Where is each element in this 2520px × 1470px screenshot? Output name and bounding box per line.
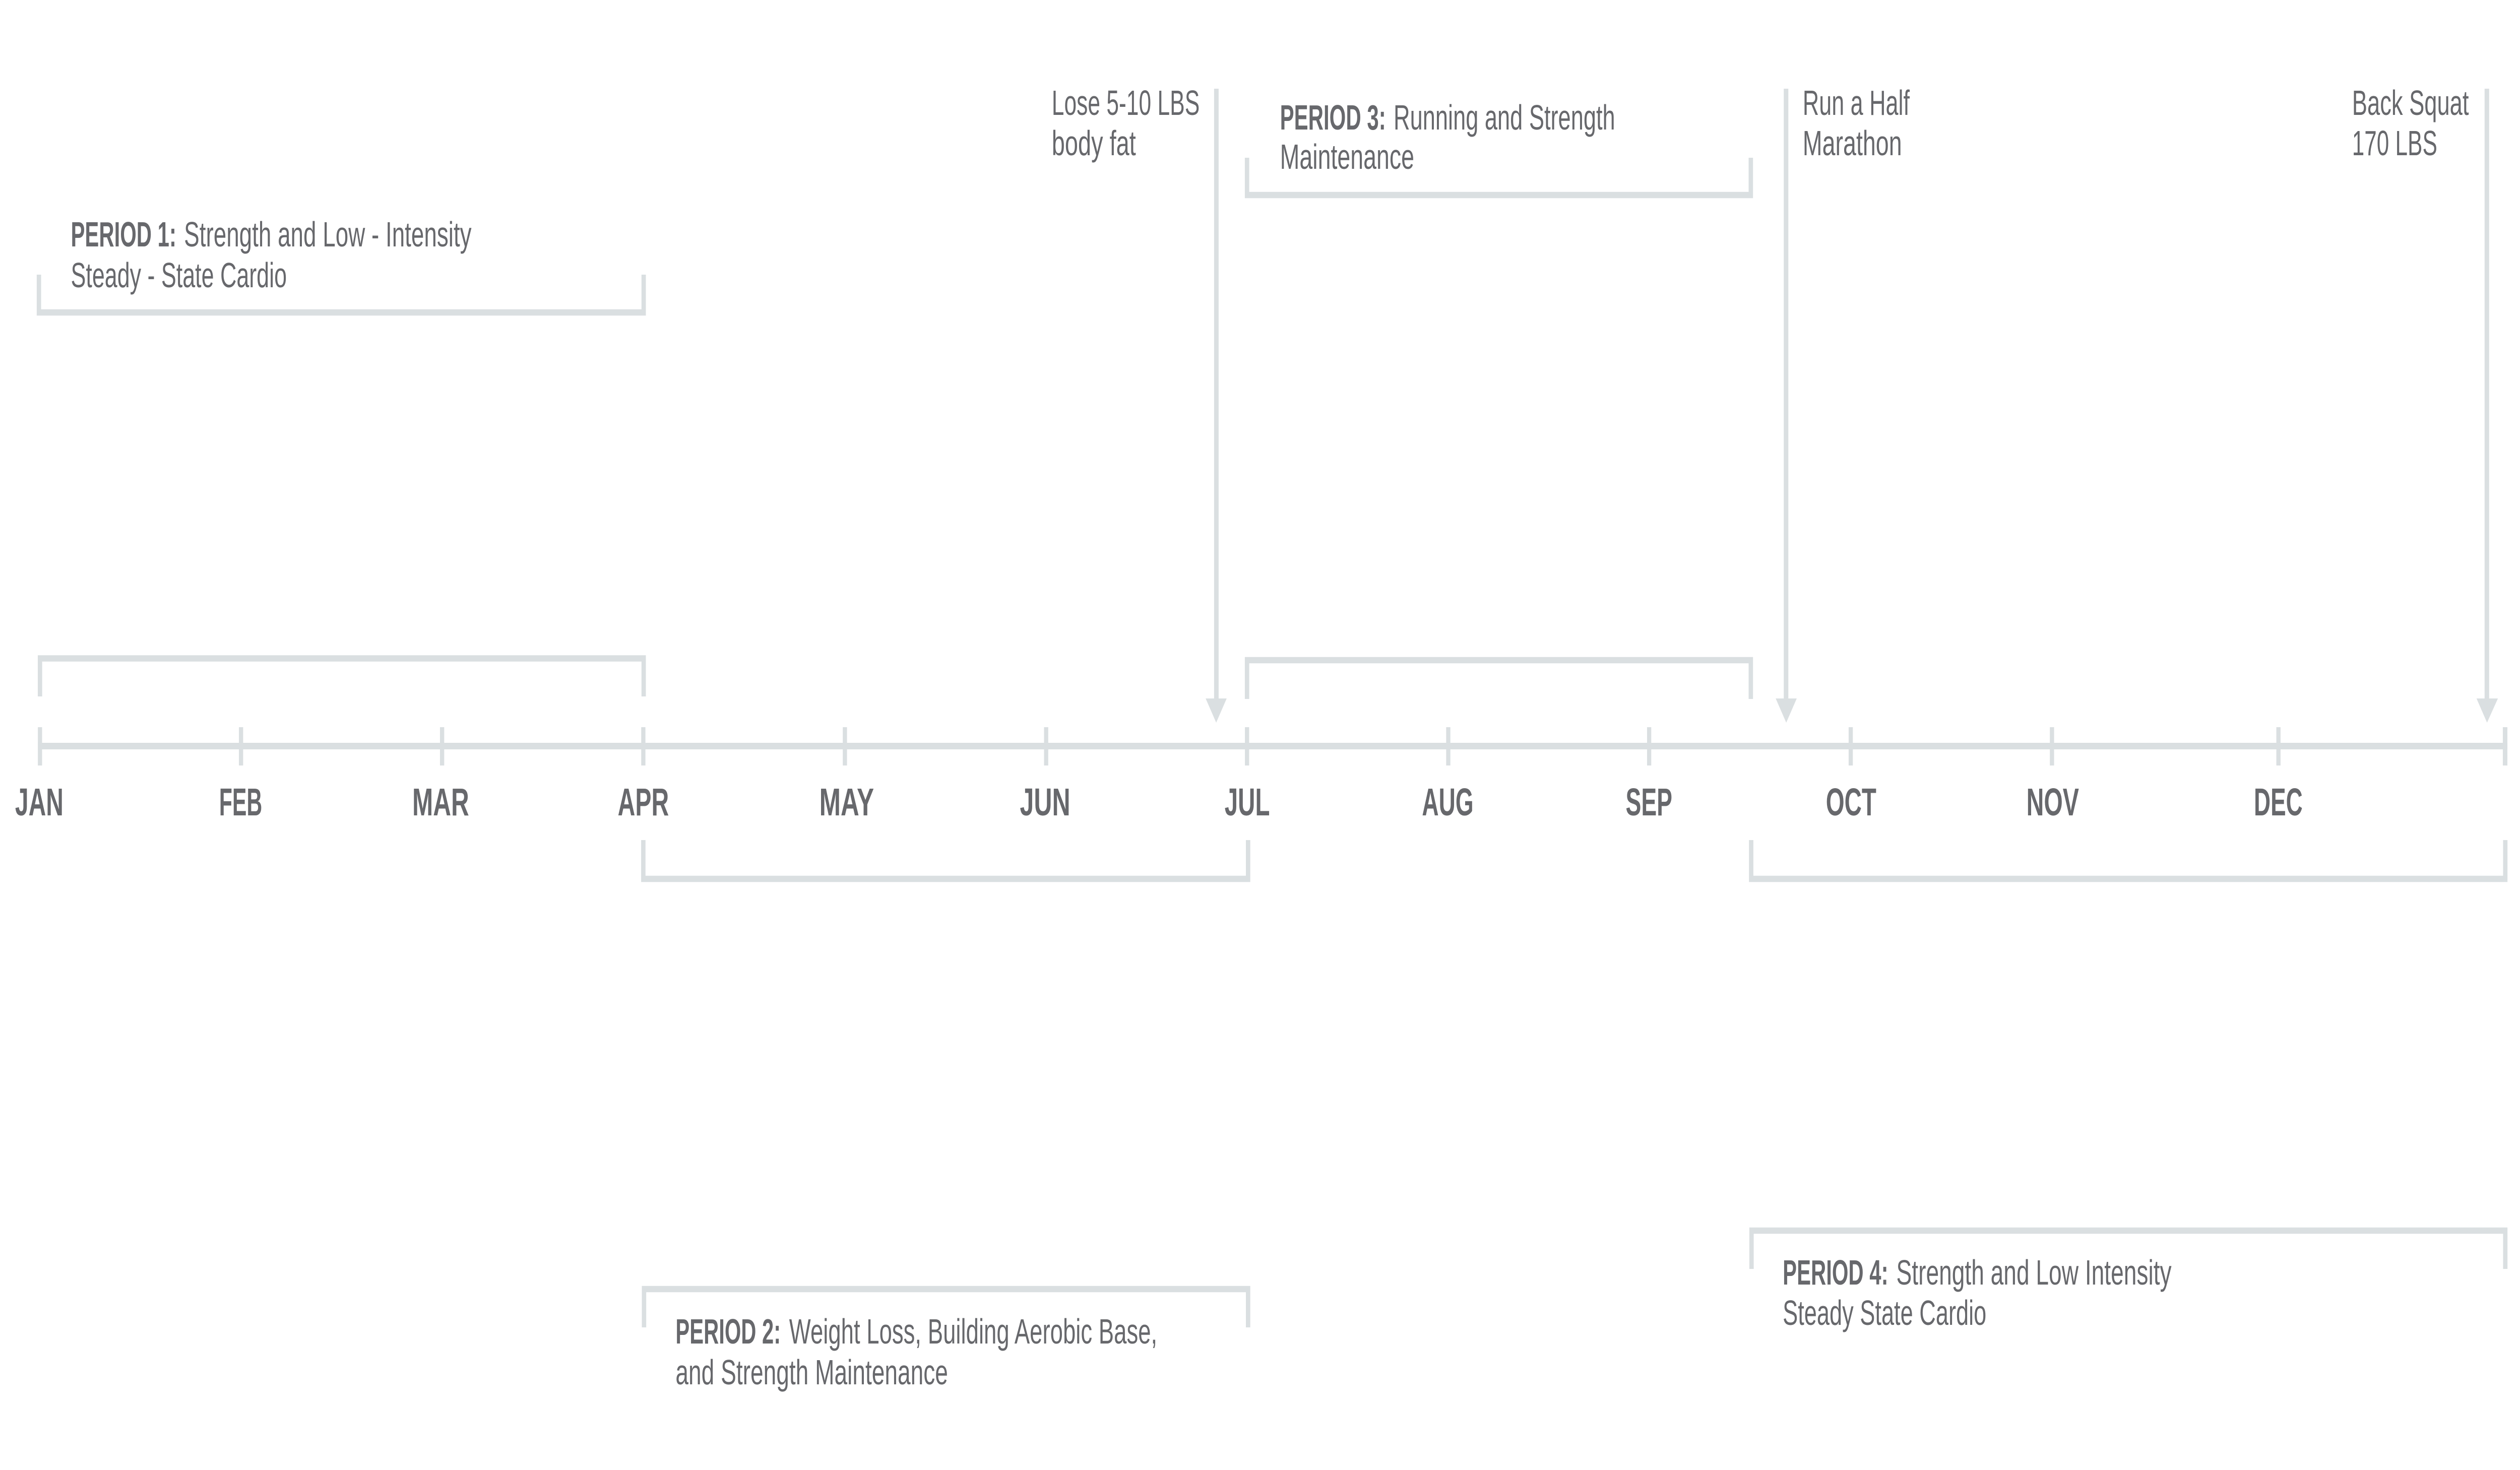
month labels: OCT	[1826, 781, 1876, 824]
goal text: lose 5-10 lbs: body fat	[1052, 123, 1136, 163]
goal text: lose 5-10 lbs: Lose 5-10 LBS	[1052, 83, 1200, 122]
month labels: MAR	[412, 781, 469, 824]
goal text: lose 5-10 lbs	[1052, 83, 1200, 163]
period 4 label with bracket	[1751, 1231, 2505, 1332]
arrow: lose weight goal	[1206, 89, 1227, 723]
period 3 span bracket	[1247, 660, 1751, 699]
period 4 label with bracket: PERIOD 4:	[1783, 1252, 1888, 1292]
period 3 label with bracket: Maintenance	[1280, 137, 1414, 176]
period 2 span bracket	[643, 840, 1248, 879]
goal text: run a half marathon: Marathon	[1803, 123, 1902, 163]
month labels: JUN	[1020, 781, 1070, 824]
period 1 label with bracket	[39, 214, 644, 312]
month labels: MAY	[820, 781, 874, 824]
month labels: AUG	[1422, 781, 1474, 824]
period 1 label with bracket: Strength and Low - Intensity	[184, 214, 472, 254]
period 2 label with bracket	[644, 1289, 1248, 1392]
period 4 span bracket	[1751, 840, 2505, 879]
period 2 label with bracket: and Strength Maintenance	[675, 1352, 948, 1392]
period 2 label with bracket: Weight Loss, Building Aerobic Base,	[789, 1311, 1157, 1351]
arrow: back squat goal	[2477, 89, 2498, 723]
month labels: NOV	[2027, 781, 2079, 824]
period 1 label with bracket: PERIOD 1:	[71, 214, 176, 254]
arrow: half marathon goal	[1776, 89, 1797, 723]
period 3 label with bracket	[1247, 97, 1751, 195]
goal text: back squat 170 lbs: 170 LBS	[2352, 123, 2437, 163]
goal text: back squat 170 lbs: Back Squat	[2352, 83, 2469, 122]
month labels: JUL	[1225, 781, 1270, 824]
goal text: run a half marathon	[1803, 83, 1910, 163]
month labels: SEP	[1626, 781, 1672, 824]
period 3 label with bracket: PERIOD 3:	[1280, 97, 1386, 137]
period 3 label with bracket: Running and Strength	[1394, 97, 1615, 137]
period 2 label with bracket: PERIOD 2:	[675, 1311, 781, 1351]
month labels: DEC	[2254, 781, 2303, 824]
period 1 label with bracket: Steady - State Cardio	[71, 255, 287, 295]
month labels: FEB	[219, 781, 262, 824]
period 4 label with bracket: Steady State Cardio	[1783, 1293, 1986, 1332]
period 1 span bracket	[40, 658, 644, 696]
period 4 label with bracket: Strength and Low Intensity	[1897, 1252, 2172, 1292]
goal text: run a half marathon: Run a Half	[1803, 83, 1910, 122]
goal text: back squat 170 lbs	[2352, 83, 2469, 163]
month labels: APR	[618, 781, 669, 824]
month labels: JAN	[15, 781, 64, 824]
timeline axis	[38, 727, 2507, 765]
month labels	[15, 781, 2303, 824]
